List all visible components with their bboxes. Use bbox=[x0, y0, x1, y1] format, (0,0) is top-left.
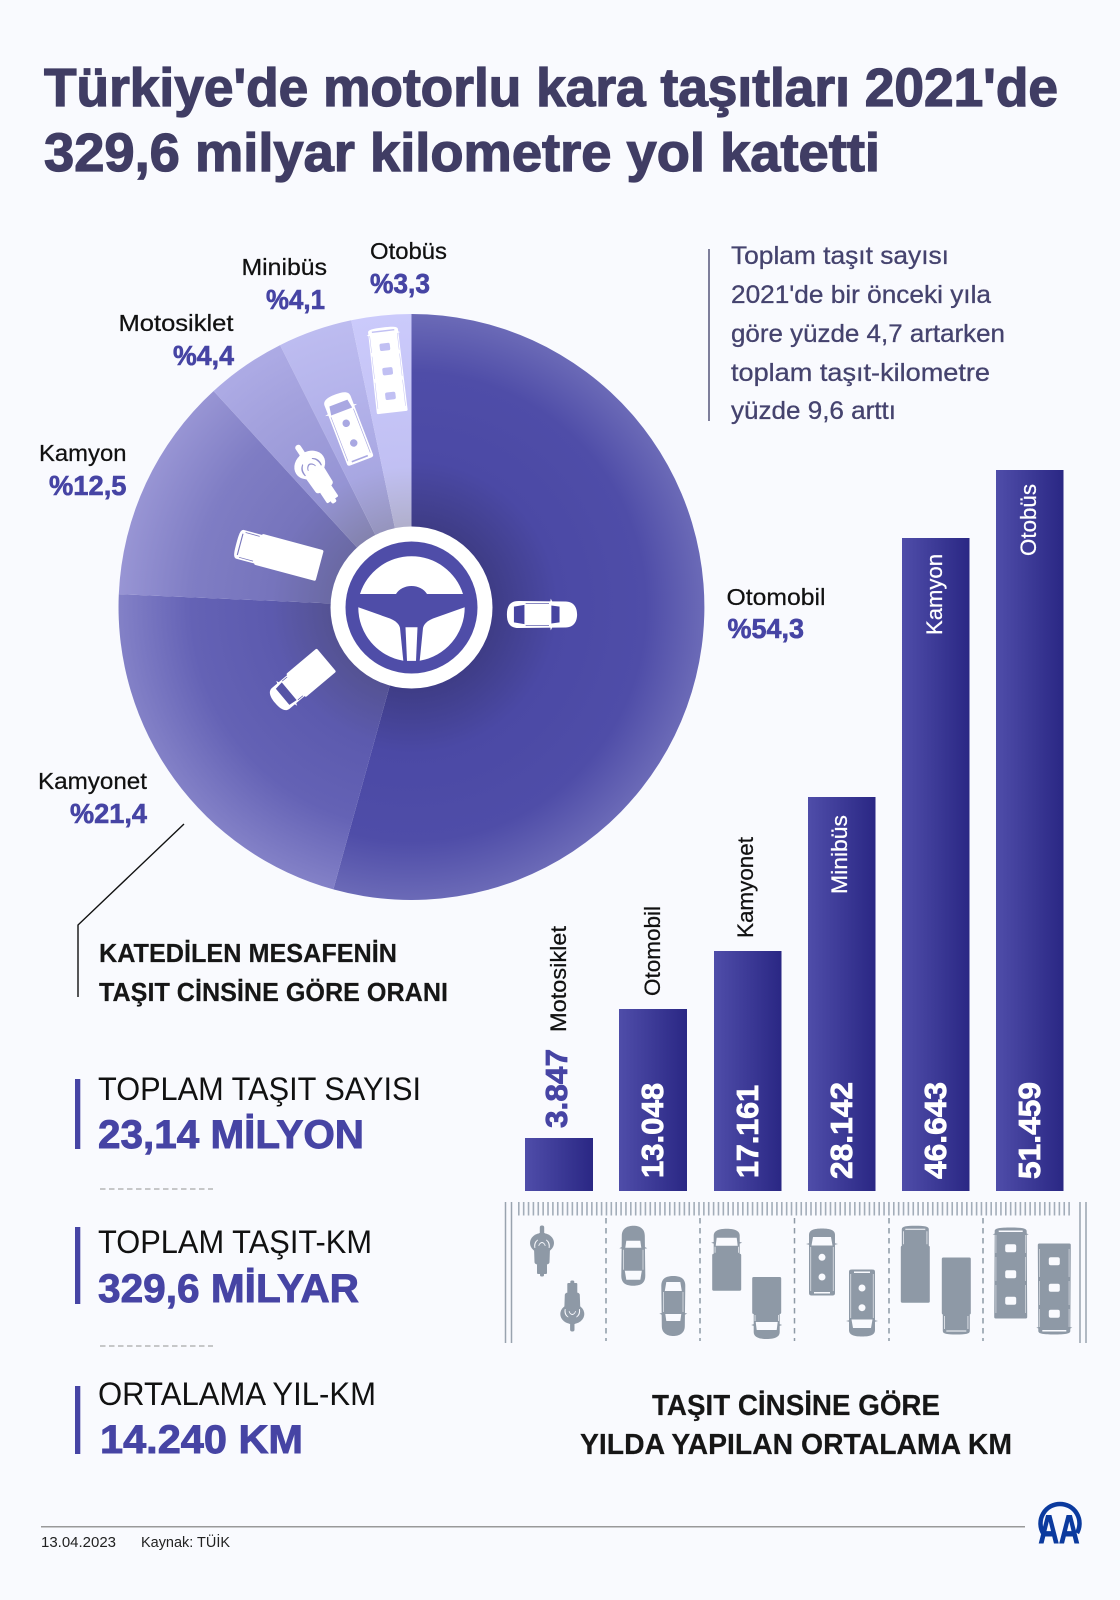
label: Kamyonet: Kamyonet bbox=[38, 768, 148, 794]
bar chart heading bbox=[580, 1389, 1012, 1461]
bar chart: average km per year by vehicle type bbox=[525, 470, 1064, 1191]
label: Kamyonet: %21,4 bbox=[70, 798, 147, 829]
stat: total vehicles bbox=[75, 1071, 421, 1157]
label: Minibüs bbox=[242, 254, 327, 315]
bar: Otomobil bbox=[619, 906, 687, 1191]
icon: trucks bbox=[901, 1226, 971, 1334]
label: Kamyon bbox=[39, 440, 126, 501]
label: Otobüs: Otobüs bbox=[370, 238, 447, 264]
label: Otobüs bbox=[370, 238, 447, 299]
icon: vans bbox=[711, 1229, 782, 1339]
bar chart heading: YILDA YAPILAN ORTALAMA KM bbox=[580, 1429, 1012, 1461]
logo: AA: AA bbox=[1038, 1508, 1080, 1552]
title bbox=[44, 58, 1058, 183]
bar: Otomobil: Otomobil bbox=[640, 906, 665, 996]
bar: Otobüs: Otobüs bbox=[1016, 484, 1041, 556]
footer: date and source: Kaynak: TÜİK bbox=[141, 1533, 230, 1551]
road illustration bbox=[506, 1202, 1086, 1343]
icon: white motorcycle on pie bbox=[283, 436, 348, 512]
label: Motosiklet bbox=[118, 310, 234, 371]
icon: minibuses bbox=[806, 1228, 878, 1336]
bar: Otomobil: 13.048 bbox=[635, 1083, 670, 1178]
icon: white car on pie bbox=[507, 599, 577, 630]
bar: Kamyon: 46.643 bbox=[918, 1082, 953, 1179]
callout: total vehicle note: Toplam taşıt sayısı bbox=[731, 242, 949, 270]
callout: total vehicle note: yüzde 9,6 arttı bbox=[731, 397, 896, 425]
pie chart heading with leader line bbox=[78, 824, 448, 1007]
label: Motosiklet: Motosiklet bbox=[118, 310, 234, 336]
footer: date and source bbox=[41, 1527, 1025, 1551]
callout: total vehicle note: toplam taşıt-kilometre bbox=[731, 359, 990, 387]
icon: white minibus on pie bbox=[319, 388, 377, 468]
title: 329,6 milyar kilometre yol katetti bbox=[44, 123, 880, 183]
icon: cars bbox=[619, 1226, 687, 1336]
slice: Minibüs 4.1 bbox=[280, 320, 412, 607]
icon: white van on pie bbox=[265, 648, 337, 715]
icon: white truck on pie bbox=[232, 528, 324, 581]
label: Kamyonet bbox=[38, 768, 148, 829]
label: Minibüs: %4,1 bbox=[266, 284, 325, 315]
stat: total vehicle-km: TOPLAM TAŞIT-KM bbox=[98, 1224, 372, 1260]
bar: Kamyon: Kamyon bbox=[922, 554, 947, 635]
bar: Motosiklet bbox=[525, 926, 593, 1191]
stat: total vehicles: 23,14 MİLYON bbox=[98, 1113, 364, 1157]
bar chart heading: TAŞIT CİNSİNE GÖRE bbox=[652, 1389, 940, 1422]
stat: average yearly km: 14.240 KM bbox=[100, 1418, 303, 1462]
stat: average yearly km bbox=[75, 1376, 376, 1462]
footer: date and source: 13.04.2023 bbox=[41, 1535, 116, 1551]
callout: total vehicle note: 2021'de bir önceki yıla bbox=[731, 281, 991, 309]
label: Otobüs: %3,3 bbox=[370, 268, 430, 299]
bar: Minibüs: Minibüs bbox=[827, 815, 852, 894]
label: Kamyon: Kamyon bbox=[39, 440, 126, 466]
callout: total vehicle note bbox=[709, 242, 1005, 425]
bar: Kamyonet: Kamyonet bbox=[733, 837, 758, 938]
bar: Kamyonet bbox=[714, 837, 782, 1191]
icon: motorcycles bbox=[530, 1226, 584, 1332]
slice: Kamyon 12.5 bbox=[119, 391, 412, 607]
bar: Otobüs: 51.459 bbox=[1012, 1082, 1047, 1179]
icon: steering wheel bbox=[330, 526, 492, 688]
pie chart heading with leader line: TAŞIT CİNSİNE GÖRE ORANI bbox=[99, 977, 448, 1007]
bar: Otobüs bbox=[996, 470, 1064, 1191]
label: Motosiklet: %4,4 bbox=[173, 340, 234, 371]
label: Otomobil: %54,3 bbox=[728, 613, 804, 644]
bar: Minibüs bbox=[808, 797, 876, 1191]
label: Kamyon: %12,5 bbox=[49, 470, 126, 501]
bar: Minibüs: 28.142 bbox=[824, 1082, 859, 1179]
slice: Otomobil 54.3 bbox=[333, 314, 704, 900]
slice: Motosiklet 4.4 bbox=[214, 345, 412, 607]
bar: Motosiklet: Motosiklet bbox=[546, 926, 571, 1032]
bar: Kamyonet: 17.161 bbox=[730, 1085, 765, 1178]
stat: average yearly km: ORTALAMA YIL-KM bbox=[98, 1376, 376, 1412]
icon: white bus on pie bbox=[366, 326, 409, 414]
bar: Motosiklet: 3.847 bbox=[539, 1049, 574, 1128]
pie chart heading with leader line: KATEDİLEN MESAFENİN bbox=[99, 938, 397, 968]
label: Minibüs: Minibüs bbox=[242, 254, 327, 280]
bar: Kamyon bbox=[902, 538, 970, 1191]
icon: buses bbox=[993, 1228, 1072, 1334]
stat: total vehicles: TOPLAM TAŞIT SAYISI bbox=[98, 1071, 421, 1107]
callout: total vehicle note: göre yüzde 4,7 artarken bbox=[731, 320, 1005, 348]
stat: total vehicle-km bbox=[75, 1224, 372, 1311]
slice: Kamyonet 21.4 bbox=[119, 594, 412, 889]
pie chart: distance share by vehicle type bbox=[119, 314, 704, 900]
stat: total vehicle-km: 329,6 MİLYAR bbox=[98, 1267, 359, 1311]
title: Türkiye'de motorlu kara taşıtları 2021'de bbox=[44, 58, 1058, 118]
logo: AA bbox=[1038, 1504, 1080, 1552]
label: Otomobil: Otomobil bbox=[726, 584, 826, 610]
slice: Otobüs 3.3 bbox=[351, 314, 412, 607]
label: Otomobil bbox=[726, 584, 826, 644]
